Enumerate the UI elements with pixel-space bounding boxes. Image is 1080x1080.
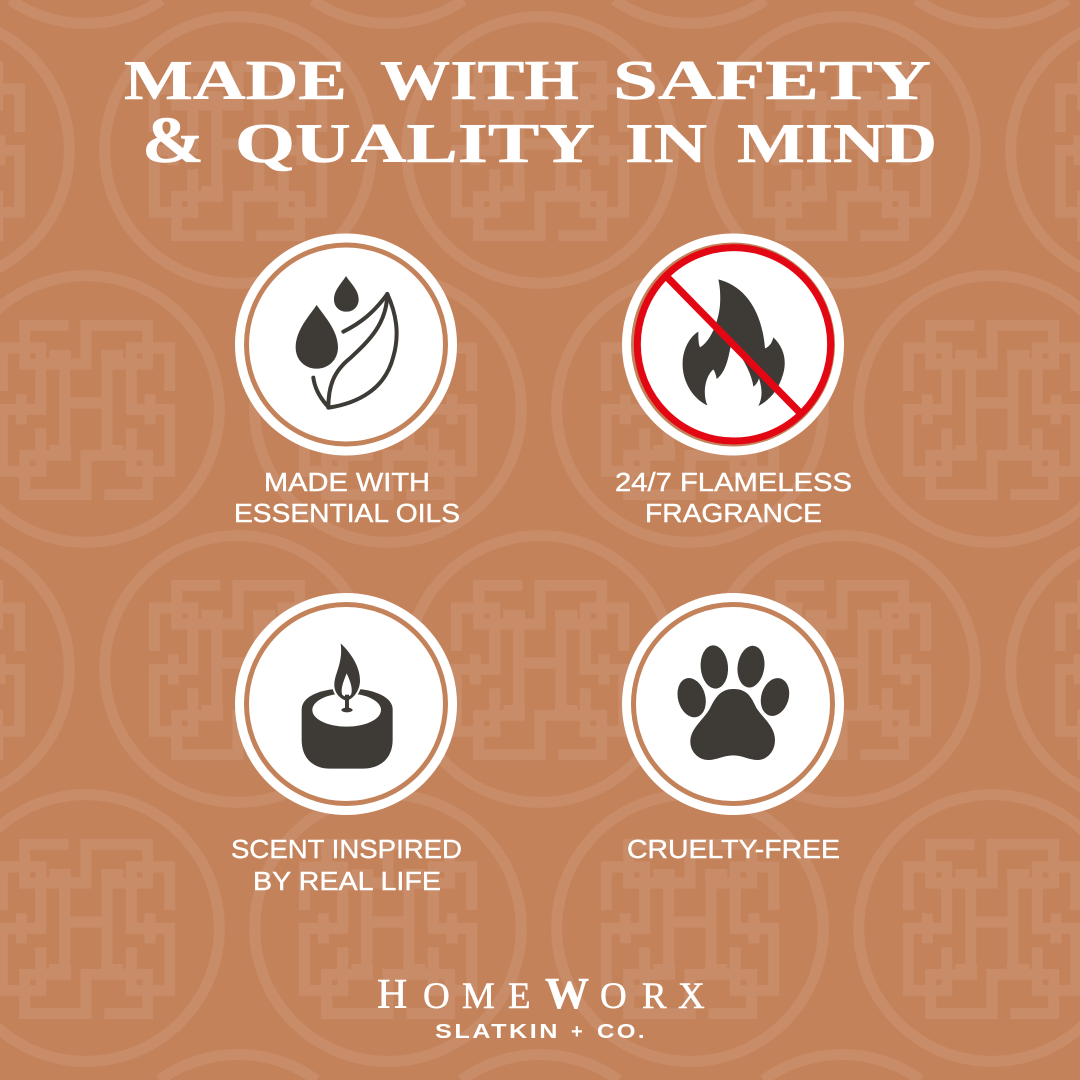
logo: HomeWorx Slatkin + Co.: X bbox=[678, 976, 705, 1017]
logo: HomeWorx Slatkin + Co.: W bbox=[545, 969, 589, 1018]
icon: oil drops and leaf bbox=[296, 276, 397, 408]
logo: HomeWorx Slatkin + Co.: H bbox=[377, 972, 407, 1018]
logo: HomeWorx Slatkin + Co.: CO. bbox=[597, 1021, 647, 1043]
label: made with essential oils: ESSENTIAL OILS bbox=[234, 498, 460, 528]
title: SAFETY bbox=[613, 50, 931, 112]
logo: HomeWorx Slatkin + Co.: SLATKIN bbox=[435, 1021, 560, 1043]
logo: HomeWorx Slatkin + Co.: O bbox=[600, 976, 627, 1017]
label: 24/7 flameless fragrance: FRAGRANCE bbox=[645, 498, 822, 528]
label: scent inspired by real life: SCENT INSPIRED bbox=[231, 834, 462, 864]
title: IN bbox=[625, 113, 707, 175]
icon: red prohibition sign bbox=[637, 248, 831, 441]
badge: scent inspired bbox=[235, 593, 457, 815]
title bbox=[124, 50, 937, 177]
badge: cruelty-free bbox=[622, 593, 844, 815]
icon: flame bbox=[683, 279, 785, 406]
title: & bbox=[142, 104, 204, 177]
logo: HomeWorx Slatkin + Co.: R bbox=[642, 976, 667, 1017]
label: 24/7 flameless fragrance bbox=[615, 467, 852, 528]
icon: paw print bbox=[673, 644, 794, 760]
badge: flameless bbox=[622, 234, 844, 456]
icon: candle bbox=[302, 643, 393, 769]
label: cruelty-free: CRUELTY-FREE bbox=[627, 834, 840, 864]
label: 24/7 flameless fragrance: 24/7 FLAMELESS bbox=[615, 467, 852, 497]
title: MIND bbox=[737, 113, 937, 175]
title: WITH bbox=[380, 50, 579, 112]
label: scent inspired by real life: BY REAL LIFE bbox=[253, 866, 441, 896]
title: MADE bbox=[124, 50, 347, 112]
logo: HomeWorx Slatkin + Co.: E bbox=[508, 976, 531, 1017]
logo: HomeWorx Slatkin + Co.: M bbox=[462, 976, 495, 1017]
logo: HomeWorx Slatkin + Co.: O bbox=[423, 976, 450, 1017]
badge: essential oils bbox=[235, 234, 457, 456]
title: QUALITY bbox=[235, 113, 595, 175]
label: made with essential oils: MADE WITH bbox=[264, 467, 430, 497]
label: made with essential oils bbox=[234, 467, 460, 528]
logo: HomeWorx Slatkin + Co. bbox=[377, 969, 705, 1043]
logo: HomeWorx Slatkin + Co.: + bbox=[571, 1021, 583, 1043]
label: scent inspired by real life bbox=[231, 834, 462, 896]
